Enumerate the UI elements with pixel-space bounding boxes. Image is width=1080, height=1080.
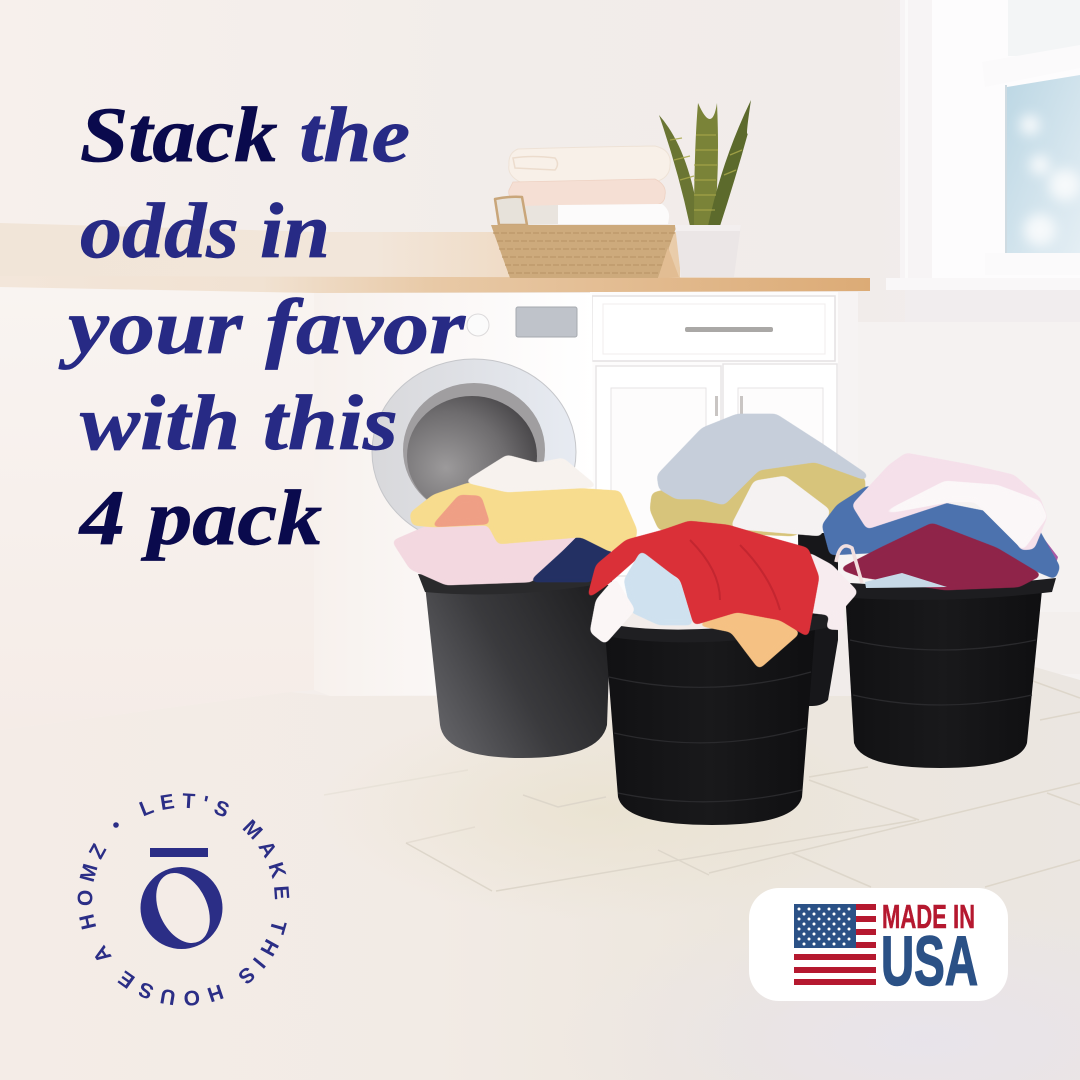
- window: [886, 0, 1080, 322]
- made in text: MADE IN: [882, 898, 975, 935]
- cabinet left: [0, 287, 314, 730]
- cabinet right: [590, 292, 858, 602]
- laundry bin: left: [392, 455, 637, 758]
- counter backsplash: [0, 223, 680, 294]
- towels in basket: [491, 146, 679, 278]
- headline: 4 pack: [78, 474, 322, 561]
- lower right wall: [858, 322, 1080, 682]
- floor: [0, 667, 1080, 1080]
- potted plant: [659, 100, 751, 277]
- counter top: [0, 276, 870, 293]
- logo seal: [78, 793, 290, 1006]
- headline: [59, 91, 466, 561]
- baseboard: [1035, 612, 1080, 674]
- laundry bin: front: [587, 521, 858, 825]
- logo mark: [140, 848, 222, 952]
- laundry bin: right: [822, 453, 1060, 768]
- usa flag icon: [794, 904, 876, 985]
- washing machine: [314, 293, 594, 696]
- made in usa badge: [749, 888, 1008, 1001]
- headline: odds in: [80, 187, 330, 274]
- headline: Stack the: [80, 91, 410, 178]
- laundry bin: rear: [650, 414, 868, 706]
- headline: your favor: [59, 283, 466, 370]
- circular slogan: LET'S MAKE THIS HOUSE A HOMZ: [78, 793, 290, 1006]
- usa text: USA: [881, 922, 978, 1000]
- headline: with this: [80, 379, 398, 466]
